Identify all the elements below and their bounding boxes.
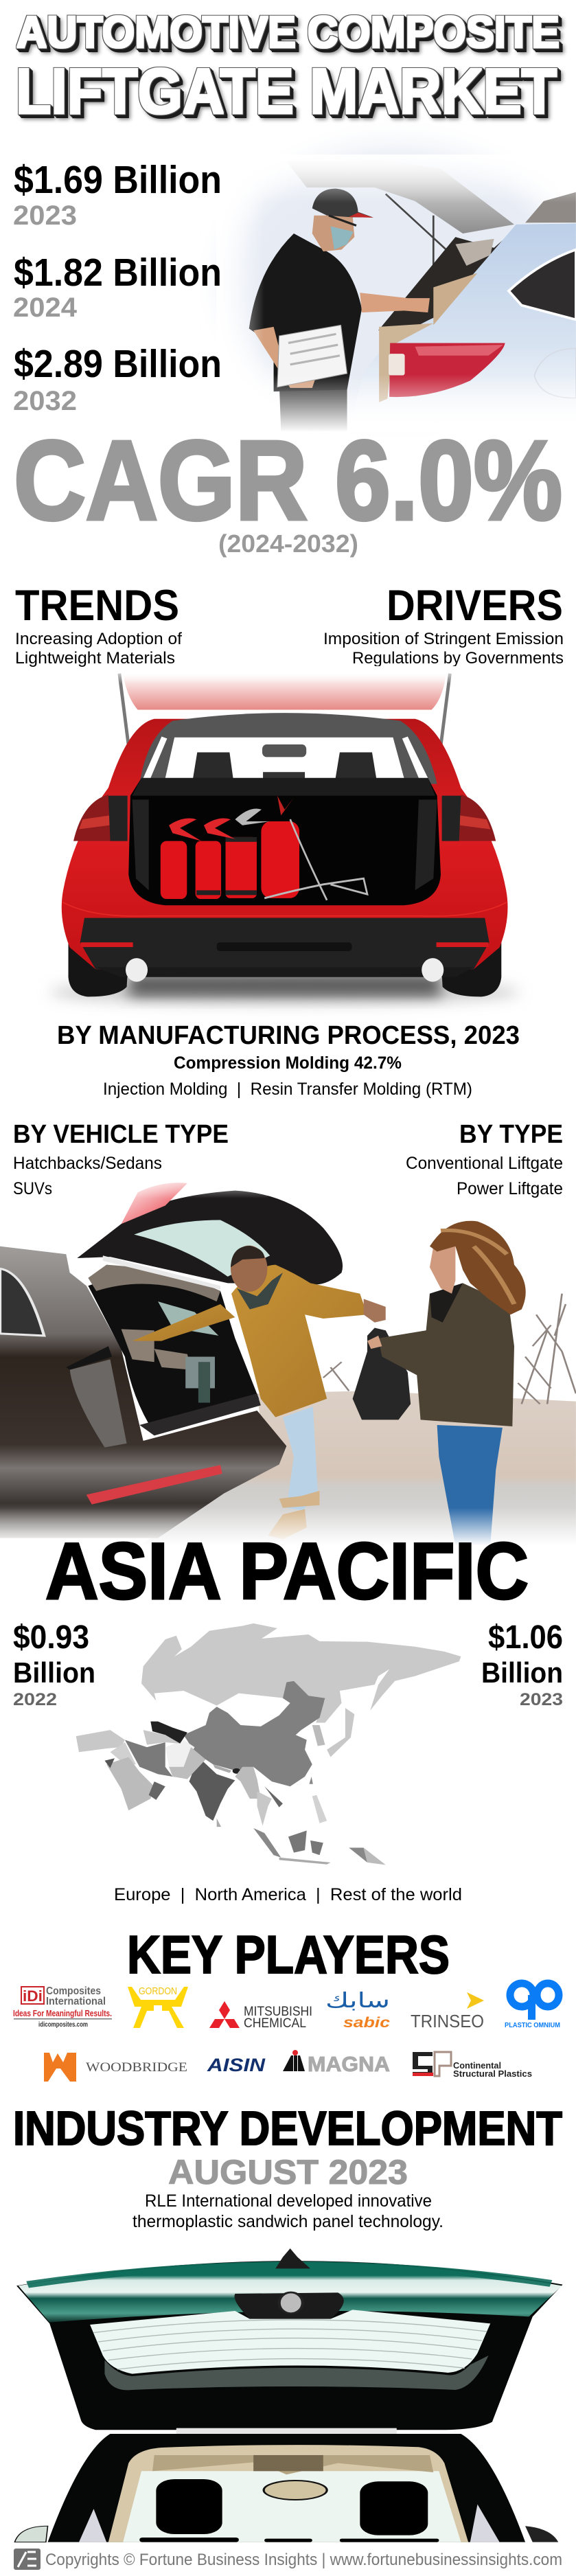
drivers block: Regulations by Governments [352, 649, 564, 668]
logo: IDI Composites International: Ideas For Meaningful Results. [13, 2008, 112, 2018]
trends block [15, 582, 182, 668]
icon: Fortune Business Insights logo [14, 2549, 41, 2570]
segment: by type: Power Liftgate [457, 1179, 563, 1198]
stat: 2022 regional value: $0.93 [13, 1619, 89, 1656]
logo: Continental Structural Plastics [413, 2052, 532, 2079]
logo: Trinseo: TRINSEO [411, 2011, 484, 2031]
stat: 2022 regional value [13, 1619, 95, 1709]
drivers block [323, 582, 564, 668]
logo: Woodbridge: WOODBRIDGE [86, 2060, 187, 2075]
logo: Plastic Omnium: PLASTIC OMNIUM [505, 2021, 560, 2029]
title [16, 7, 560, 127]
logo: Magna: MAGNA [308, 2052, 390, 2076]
logo: IDI Composites International: idicomposites.com [38, 2021, 88, 2029]
segment: by type: BY TYPE [459, 1120, 563, 1149]
logo: IDI Composites International: International [46, 1996, 106, 2007]
segment: by vehicle type: SUVs [13, 1179, 52, 1198]
segment: by manufacturing process: Injection Molding | Resin Transfer Molding (RTM) [103, 1080, 472, 1099]
stat: 2022 regional value: 2022 [13, 1690, 57, 1709]
segment: by vehicle type: BY VEHICLE TYPE [13, 1120, 229, 1149]
stat: 2024 market size [13, 251, 222, 323]
development description [133, 2191, 443, 2231]
stat: 2023 market size: 2023 [13, 201, 77, 231]
trends block: Increasing Adoption of [15, 630, 182, 648]
stat: 2032 market size [13, 342, 222, 416]
stat: 2023 market size [13, 158, 222, 231]
trends block: TRENDS [15, 582, 179, 630]
map: Asia Pacific [76, 1623, 461, 1865]
logo: Gordon [128, 1985, 188, 2028]
segment: by type [406, 1120, 563, 1198]
image: delivery man at open tailgate [224, 147, 576, 431]
development description: RLE International developed innovative [145, 2191, 432, 2211]
stat: 2023 regional value: Billion [481, 1656, 563, 1689]
other regions list: Europe | North America | Rest of the world [114, 1885, 462, 1904]
drivers block: Imposition of Stringent Emission [323, 630, 564, 648]
logo: Mitsubishi Chemical: CHEMICAL [244, 2016, 306, 2031]
logo: Continental Structural Plastics: Structural Plastics [453, 2069, 532, 2079]
stat: 2032 market size: $2.89 Billion [14, 342, 222, 386]
segment: by manufacturing process [57, 1021, 520, 1099]
segment: by vehicle type [13, 1120, 229, 1198]
logo: Continental Structural Plastics: Continental [453, 2061, 501, 2071]
segment: by type: Conventional Liftgate [406, 1154, 563, 1173]
development date: AUGUST 2023 [168, 2153, 408, 2191]
image: green hatch with open liftgate [14, 2248, 563, 2542]
image: red hatchback with extinguishers [49, 674, 520, 1009]
car shadow fade [0, 666, 576, 1023]
logo: IDI Composites International: Composites [46, 1985, 101, 1997]
stat: 2023 market size: $1.69 Billion [14, 158, 222, 202]
stat: 2024 market size: $1.82 Billion [14, 251, 222, 295]
stat: 2024 market size: 2024 [13, 293, 78, 323]
logo: Woodbridge [44, 2053, 187, 2082]
segment: by vehicle type: Hatchbacks/Sedans [13, 1154, 162, 1173]
logo: Gordon: GORDON [139, 1985, 177, 1997]
region heading: ASIA PACIFIC [45, 1526, 529, 1616]
stat: 2023 regional value: $1.06 [488, 1619, 563, 1656]
segment: by manufacturing process: Compression Molding 42.7% [174, 1053, 402, 1073]
CAGR figure: (2024-2032) [218, 529, 358, 558]
photo 2 fade overlay [0, 1171, 576, 1559]
development description: thermoplastic sandwich panel technology. [133, 2212, 443, 2231]
stat: 2023 regional value [481, 1619, 563, 1709]
logo: Sabic [325, 1989, 390, 2031]
stat: 2032 market size: 2032 [13, 386, 77, 416]
logo: Aisin: AISIN [207, 2055, 266, 2075]
key players heading: KEY PLAYERS [127, 1924, 450, 1985]
logo: Mitsubishi Chemical: MITSUBISHI [244, 2005, 312, 2019]
logo: Magna [283, 2050, 390, 2076]
logo: Plastic Omnium [505, 1983, 560, 2029]
stat: 2023 regional value: 2023 [520, 1690, 563, 1709]
logo: Trinseo [411, 1992, 484, 2031]
logo: Sabic: سابك [325, 1989, 390, 2013]
segment: by manufacturing process: BY MANUFACTURING PROCESS, 2023 [57, 1021, 520, 1050]
photo fade overlays [216, 155, 576, 433]
logo: IDI Composites International: iDi [23, 1987, 43, 2005]
image: couple at open SUV tailgate [0, 1183, 576, 1546]
logo: IDI Composites International [13, 1985, 112, 2029]
drivers block: DRIVERS [387, 582, 563, 630]
stat: 2022 regional value: Billion [13, 1656, 95, 1689]
logo: Sabic: sabic [343, 2015, 390, 2031]
logo: Mitsubishi Chemical [209, 2001, 312, 2031]
trends block: Lightweight Materials [15, 649, 175, 668]
